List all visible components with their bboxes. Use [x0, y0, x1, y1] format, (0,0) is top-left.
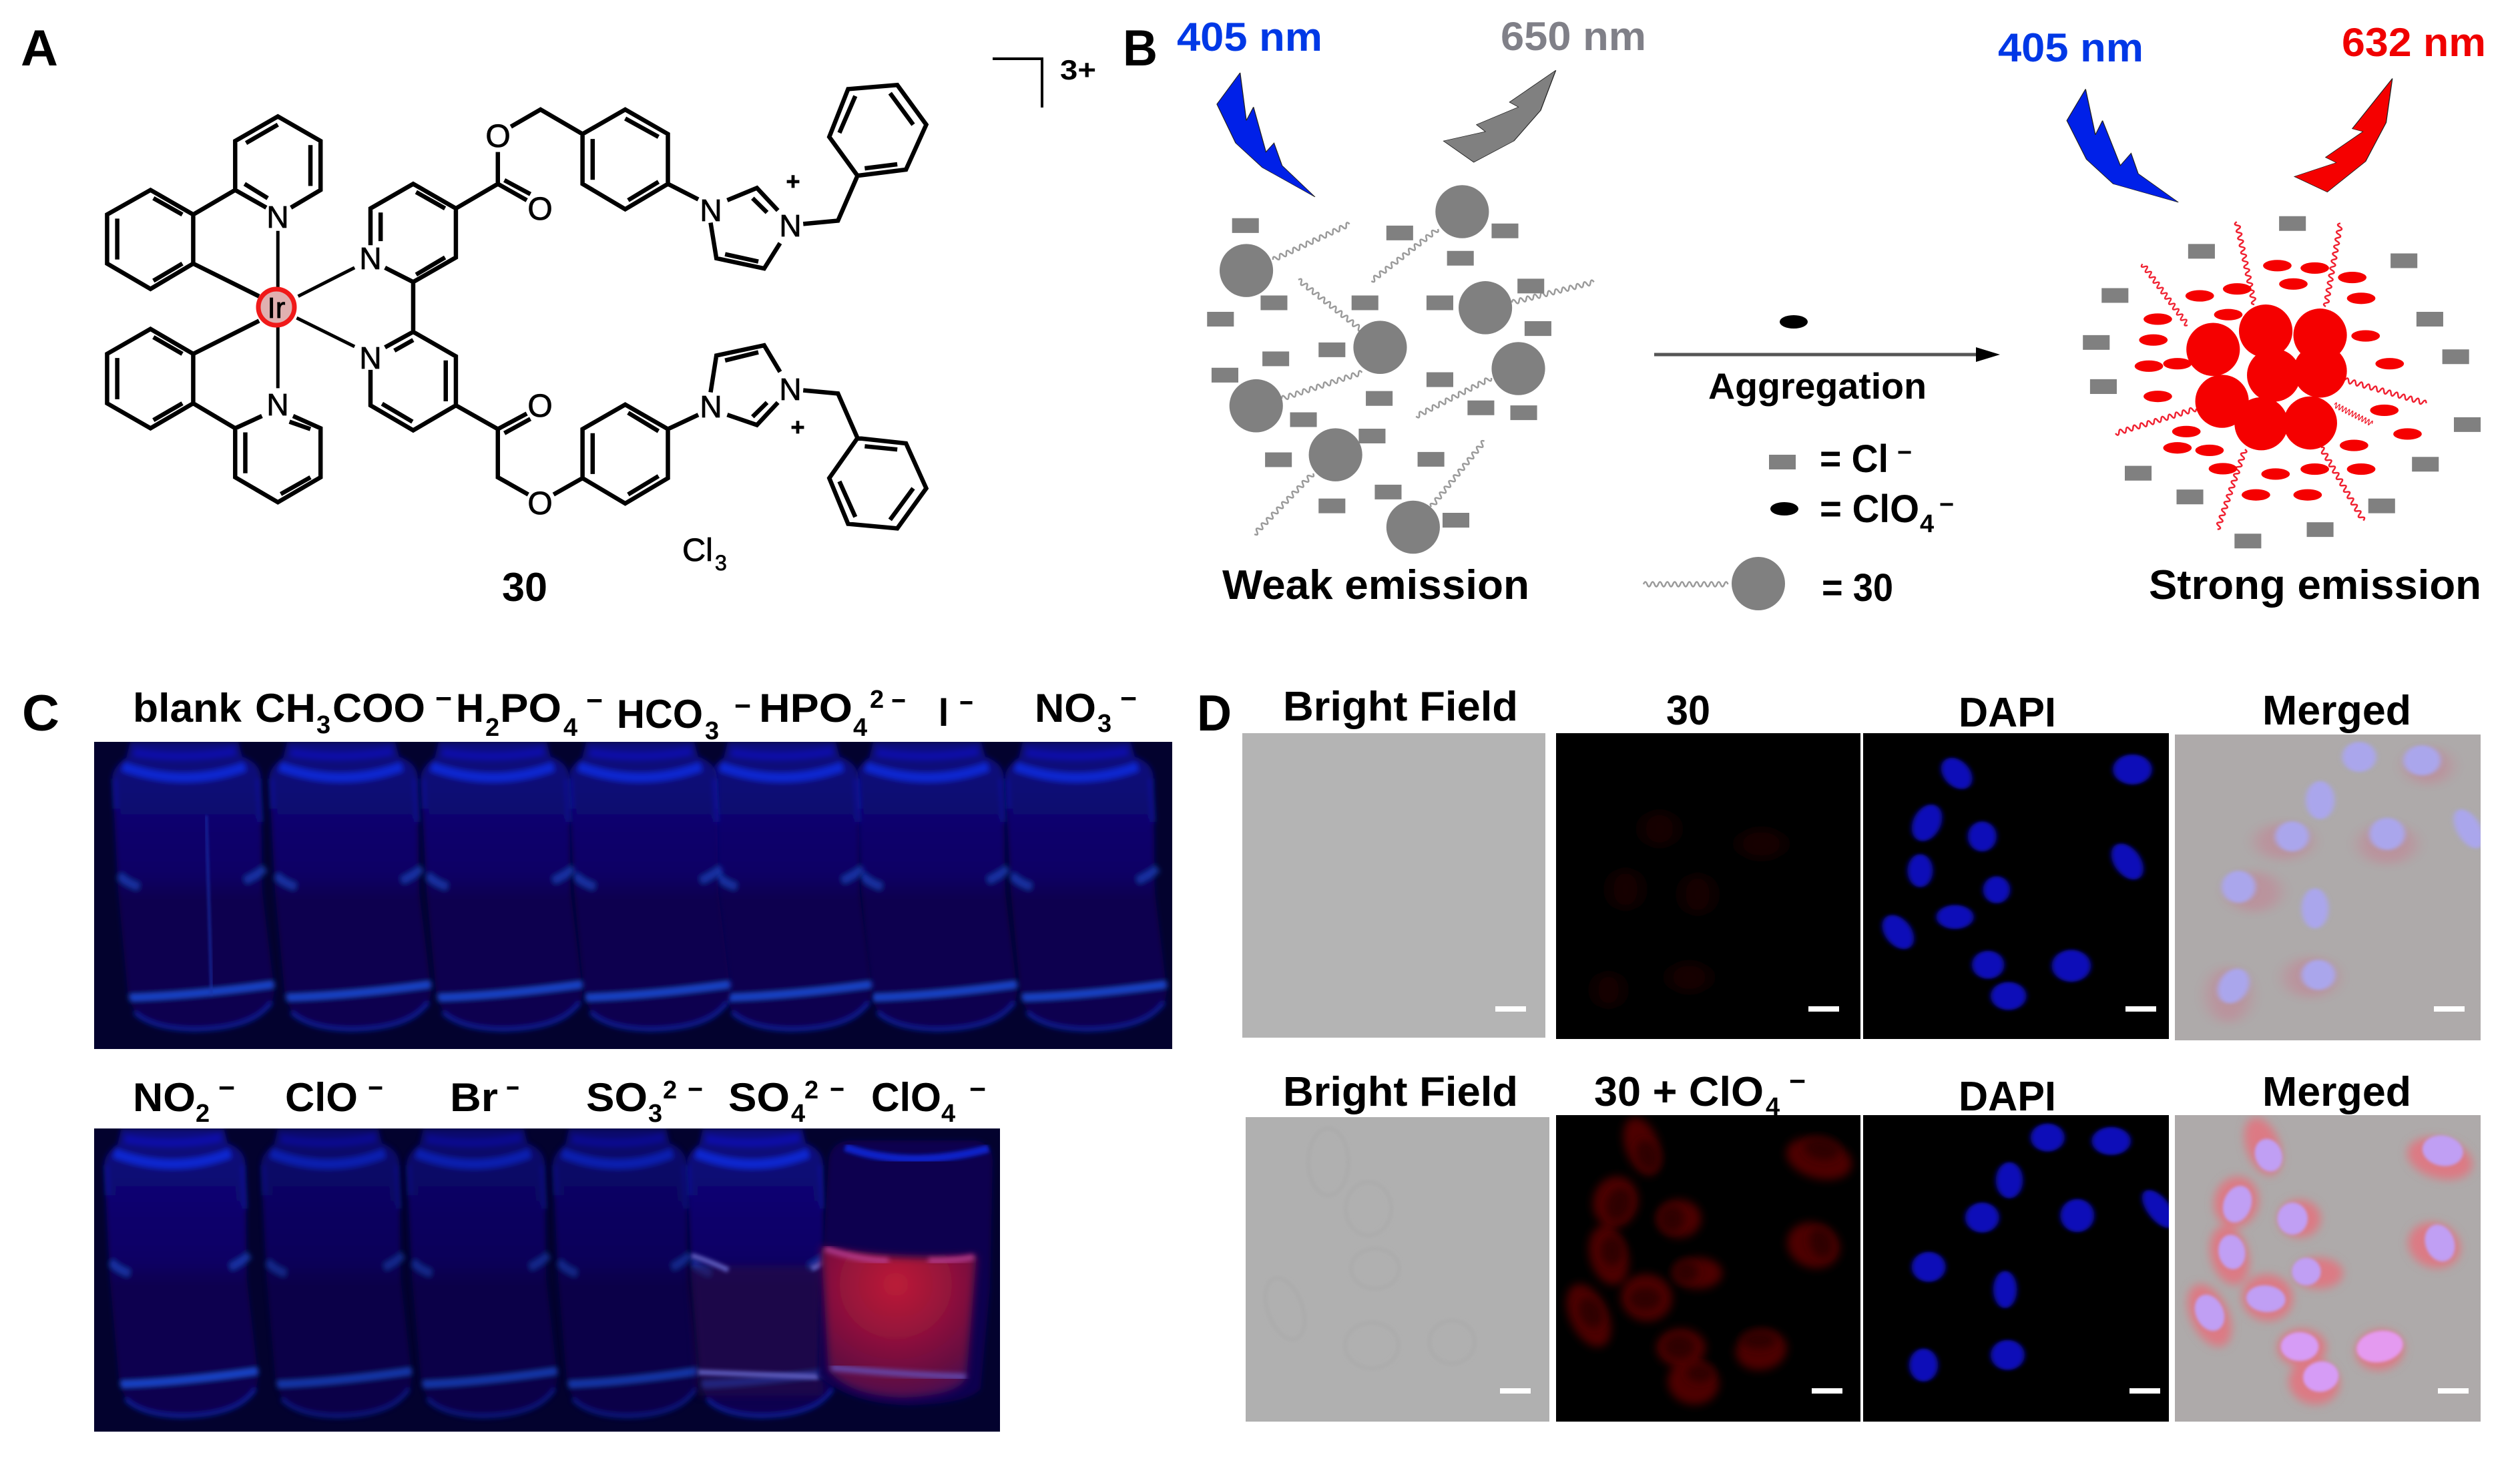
anion labels row 1: I — [939, 690, 949, 735]
atom labels: O — [527, 192, 553, 227]
anion labels row 1: − — [435, 682, 452, 715]
anion labels row 1: PO — [500, 686, 561, 731]
column headings row 2: 30 + ClO — [1594, 1069, 1764, 1115]
anion labels row 1: CH — [255, 686, 316, 731]
anion labels row 1: − — [891, 684, 906, 717]
column headings row 2: DAPI — [1959, 1074, 2056, 1120]
anion labels row 1: COO — [332, 686, 425, 731]
anion labels row 2: ClO — [285, 1075, 358, 1120]
anion labels row 1: 3 — [705, 717, 719, 745]
column headings row 2 — [1283, 1065, 2411, 1121]
emission label 650 nm: 650 nm — [1501, 14, 1646, 59]
reaction arrow with perchlorate and Aggregation label — [1654, 315, 2000, 407]
panel D: confocal microscopy grid — [1197, 684, 2490, 1422]
photo row 2: six vials with red perchlorate vial — [94, 1128, 1000, 1432]
anion labels row 2: SO — [586, 1075, 648, 1120]
compound number 30: 30 — [502, 565, 547, 610]
column headings row 2: − — [1789, 1065, 1806, 1098]
legend: − — [1939, 491, 1954, 519]
column headings row 1: Bright Field — [1283, 684, 1518, 730]
anion labels row 2: 2 — [663, 1076, 677, 1104]
iridium centre — [258, 289, 294, 325]
anion labels row 2: 3 — [648, 1100, 662, 1128]
atom labels: N — [266, 387, 289, 422]
anion labels row 1: − — [734, 690, 751, 722]
panel A: chemical structure of complex 30 — [21, 20, 1096, 610]
panel C: vial photographs — [22, 682, 1172, 1432]
anion labels row 2: − — [969, 1073, 986, 1106]
red vial — [818, 1140, 993, 1406]
DAPI image, no perchlorate — [1863, 733, 2169, 1039]
charge bracket 3+ — [993, 54, 1096, 108]
anion labels row 1: HCO — [617, 692, 703, 737]
legend: = 30 — [1822, 566, 1893, 610]
legend — [1644, 437, 1954, 610]
anion labels row 1: 2 — [485, 714, 499, 742]
merged image, with perchlorate — [2175, 1115, 2481, 1422]
anion labels row 1: 4 — [853, 714, 867, 742]
anion labels row 2: − — [830, 1073, 844, 1106]
atom labels — [266, 119, 805, 522]
anion labels row 2: 2 — [196, 1100, 210, 1128]
column headings row 2: 4 — [1766, 1093, 1780, 1121]
complex 30 plus perchlorate image, red cells — [1556, 1115, 1860, 1422]
legend: 4 — [1920, 510, 1934, 538]
legend: = ClO — [1820, 487, 1919, 531]
DAPI image, with perchlorate — [1863, 1115, 2169, 1422]
anion labels row 1: − — [959, 686, 973, 719]
charge bracket 3+: 3+ — [1060, 54, 1096, 85]
anion labels row 1: blank — [133, 686, 242, 731]
column headings row 1: Merged — [2262, 688, 2411, 734]
atom labels: N — [779, 372, 802, 407]
column headings row 1 — [1283, 684, 2411, 736]
anion labels row 2: − — [218, 1072, 235, 1104]
anion labels row 2: 2 — [804, 1076, 818, 1104]
photo row 1: seven vials — [94, 742, 1172, 1049]
atom labels: N — [359, 341, 382, 375]
panel letter B: B — [1123, 20, 1158, 77]
excitation label 405 nm right: 405 nm — [1998, 25, 2144, 70]
atom labels: N — [779, 208, 802, 243]
anion labels row 2: NO — [133, 1075, 196, 1120]
column headings row 1: 30 — [1666, 688, 1710, 734]
complex 30 image, dim — [1556, 733, 1860, 1039]
counterion Cl3 — [682, 533, 727, 575]
atom labels: N — [266, 200, 289, 234]
anion labels row 2: − — [368, 1072, 383, 1104]
panel letter D: D — [1197, 685, 1232, 742]
emission label 632 nm: 632 nm — [2342, 20, 2486, 65]
weak-emission state: dispersed molecules — [1207, 185, 1595, 554]
atom labels: N — [359, 241, 382, 276]
anion labels row 1: NO — [1035, 686, 1096, 731]
legend: − — [1897, 439, 1912, 467]
faint purple tint in sulfate vial — [690, 1265, 823, 1396]
anion labels row 1 — [133, 682, 1137, 745]
bright field image, no perchlorate — [1242, 733, 1545, 1038]
legend: = Cl — [1820, 437, 1888, 481]
atom labels: O — [485, 119, 511, 154]
anion labels row 1: HPO — [759, 686, 852, 731]
counterion Cl3: Cl — [682, 533, 713, 568]
anion labels row 1: H — [456, 686, 484, 731]
atom labels: N — [700, 389, 722, 424]
anion labels row 2: Br — [450, 1075, 498, 1120]
strong-emission state: aggregate — [2083, 216, 2481, 548]
anion labels row 1: 3 — [316, 711, 330, 739]
counterion Cl3: 3 — [715, 551, 727, 575]
bright field image, with perchlorate — [1246, 1117, 1549, 1422]
anion labels row 1: 4 — [563, 714, 577, 742]
column headings row 2: Bright Field — [1283, 1069, 1518, 1115]
caption strong emission: Strong emission — [2149, 562, 2481, 608]
anion labels row 2: 4 — [941, 1100, 955, 1128]
atom labels: O — [527, 389, 553, 424]
atom labels: O — [527, 486, 553, 522]
reaction arrow with perchlorate and Aggregation label: Aggregation — [1708, 365, 1927, 407]
iridium centre: Ir — [268, 292, 285, 325]
panel letter A: A — [21, 20, 58, 77]
column headings row 2: Merged — [2262, 1069, 2411, 1115]
anion labels row 1: − — [586, 684, 603, 717]
anion labels row 2: SO — [728, 1075, 790, 1120]
panel B: aggregation schematic — [1123, 14, 2486, 610]
anion labels row 1: − — [1120, 682, 1137, 715]
atom labels: + — [790, 413, 805, 441]
caption weak emission: Weak emission — [1222, 562, 1529, 608]
panel letter C: C — [22, 685, 59, 742]
column headings row 1: DAPI — [1959, 690, 2056, 736]
anion labels row 2: ClO — [871, 1075, 941, 1120]
excitation label 405 nm left: 405 nm — [1177, 15, 1322, 59]
anion labels row 1: 2 — [870, 686, 884, 714]
atom labels: + — [786, 168, 800, 195]
anion labels row 2 — [133, 1072, 986, 1128]
anion labels row 2: − — [688, 1073, 703, 1106]
merged image, no perchlorate — [2175, 735, 2481, 1040]
molecular skeleton bonds — [107, 85, 927, 528]
anion labels row 2: 4 — [791, 1100, 805, 1128]
lightning bolts — [1217, 70, 2392, 202]
atom labels: N — [700, 193, 722, 228]
anion labels row 1: 3 — [1097, 710, 1111, 738]
anion labels row 2: − — [506, 1072, 519, 1104]
